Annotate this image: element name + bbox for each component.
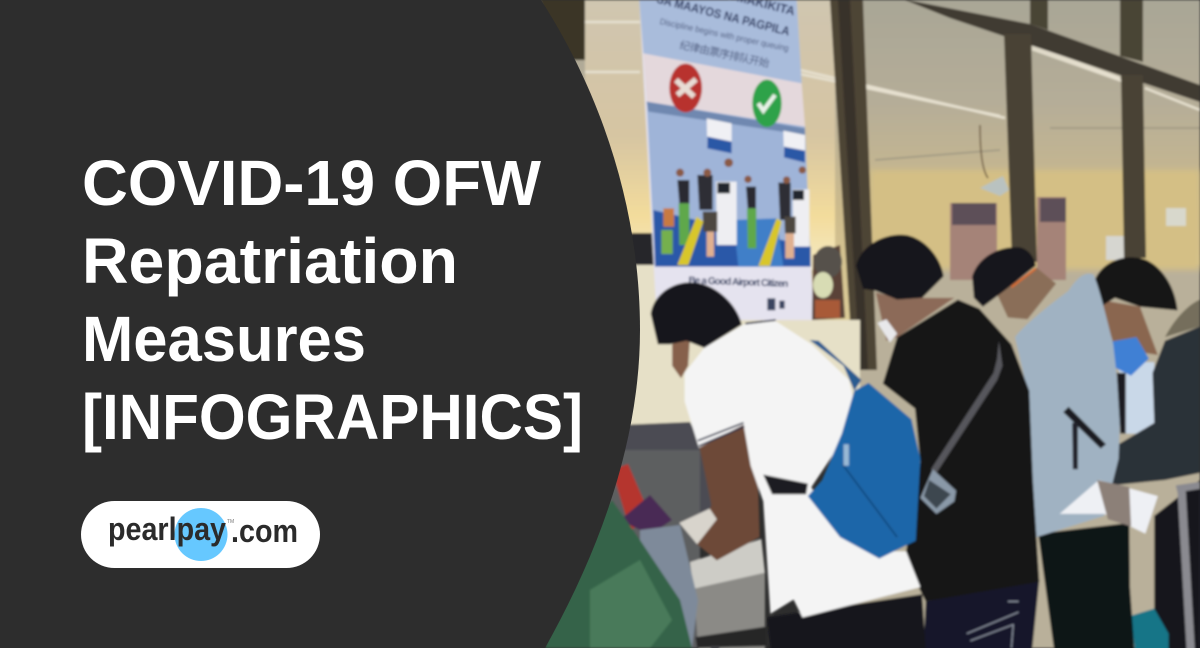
- cream wall: [625, 265, 860, 430]
- airport ceiling and windows: [540, 0, 1200, 648]
- poster text: 纪律由票序排队开始: [678, 38, 771, 70]
- counter: [690, 539, 767, 648]
- foreground luggage: [545, 464, 698, 648]
- poster footer text: Be a Good Airport Citizen: [688, 275, 789, 290]
- far wall signs: [950, 197, 1066, 280]
- traveller 2: man in black shirt: [856, 235, 1039, 648]
- blue backpack: [808, 340, 920, 559]
- photo: airport check-in queue: [540, 0, 1200, 648]
- title: [INFOGRAPHICS]: [82, 381, 583, 453]
- poster illustration: flags and figures: [661, 118, 809, 266]
- icon: red cross: [669, 64, 702, 112]
- traveller 3: man in grey hoodie and cap: [972, 247, 1136, 648]
- queue etiquette poster: [639, 0, 814, 320]
- poster text: Discipline begins with proper queuing: [659, 16, 790, 53]
- traveller hand: [1097, 480, 1131, 526]
- dark panel: [0, 0, 640, 648]
- title: [82, 147, 583, 453]
- logo: pearlpay.com pill: .com: [231, 513, 298, 549]
- background traveller with mask: [812, 245, 845, 320]
- travellers: [651, 235, 1200, 648]
- title: Repatriation: [82, 225, 458, 297]
- title: COVID-19 OFW: [82, 147, 542, 219]
- poster text: [655, 0, 797, 70]
- title: Measures: [82, 303, 366, 375]
- icon: green check: [752, 80, 782, 127]
- traveller 4: man in blue mask and dark jacket: [1093, 257, 1200, 648]
- logo: pearlpay.com pill: TM: [227, 519, 234, 525]
- logo: pearlpay.com pill: [81, 501, 320, 568]
- logo: pearlpay.com pill: pearlpay: [108, 511, 226, 547]
- papers: [1060, 480, 1158, 534]
- traveller 1: man in white polo: [651, 282, 927, 648]
- window frames: [905, 0, 1200, 102]
